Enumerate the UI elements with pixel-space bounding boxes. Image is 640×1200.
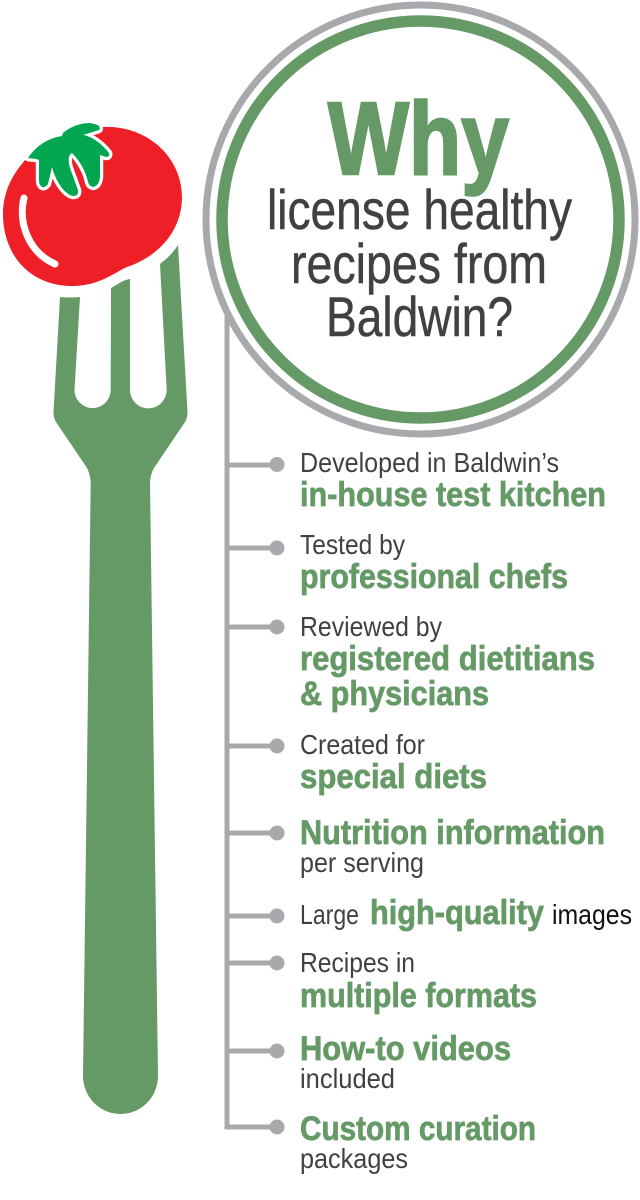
tomato highlight bbox=[22, 198, 55, 264]
list item: special diets: special diets bbox=[300, 758, 487, 796]
list item: videos: How-to videos bbox=[300, 1030, 511, 1068]
title: subtitle: license healthy bbox=[267, 178, 572, 241]
list item: test kitchen bbox=[300, 447, 606, 514]
list item: dietitians: Reviewed by bbox=[300, 611, 442, 642]
list item: images: Large bbox=[300, 899, 359, 930]
list item: curation: packages bbox=[300, 1143, 408, 1174]
title: subtitle: recipes from bbox=[291, 232, 547, 295]
title badge bbox=[206, 5, 635, 434]
list item: special diets: Created for bbox=[300, 729, 425, 760]
list item: formats bbox=[300, 947, 537, 1015]
list item: videos bbox=[300, 1030, 511, 1094]
title: Why: Why bbox=[328, 81, 509, 196]
list item: nutrition bbox=[300, 814, 605, 878]
icon: tomato bbox=[3, 123, 182, 286]
list item: images: images bbox=[552, 899, 632, 930]
list item: videos: included bbox=[300, 1063, 395, 1094]
list item: special diets bbox=[300, 729, 487, 796]
bullet dots bbox=[270, 457, 284, 1134]
list item: dietitians: & physicians bbox=[300, 675, 489, 713]
inner green ring bbox=[222, 21, 619, 418]
list item: dietitians bbox=[300, 611, 595, 713]
list item: test kitchen: Developed in Baldwin’s bbox=[300, 447, 559, 478]
list item: chefs: professional chefs bbox=[300, 558, 568, 596]
title: subtitle: Baldwin? bbox=[326, 285, 513, 348]
list item: chefs: Tested by bbox=[300, 529, 405, 560]
tomato calyx bbox=[28, 123, 109, 196]
list item: formats: multiple formats bbox=[300, 977, 537, 1015]
list item: dietitians: registered dietitians bbox=[300, 640, 595, 678]
list item: formats: Recipes in bbox=[300, 947, 415, 978]
fork bbox=[54, 245, 188, 1114]
outer grey ring bbox=[206, 5, 635, 434]
tomato body bbox=[3, 127, 182, 286]
list item: curation bbox=[300, 1110, 536, 1174]
title: subtitle bbox=[267, 178, 572, 348]
list item: test kitchen: in-house test kitchen bbox=[300, 476, 606, 514]
list item: curation: Custom curation bbox=[300, 1110, 536, 1148]
list item: chefs bbox=[300, 529, 568, 596]
timeline connector bbox=[227, 315, 284, 1134]
list item: nutrition: Nutrition information bbox=[300, 814, 605, 852]
list item: images bbox=[300, 894, 632, 932]
list item: images: high-quality bbox=[370, 894, 544, 932]
list item: nutrition: per serving bbox=[300, 847, 424, 878]
